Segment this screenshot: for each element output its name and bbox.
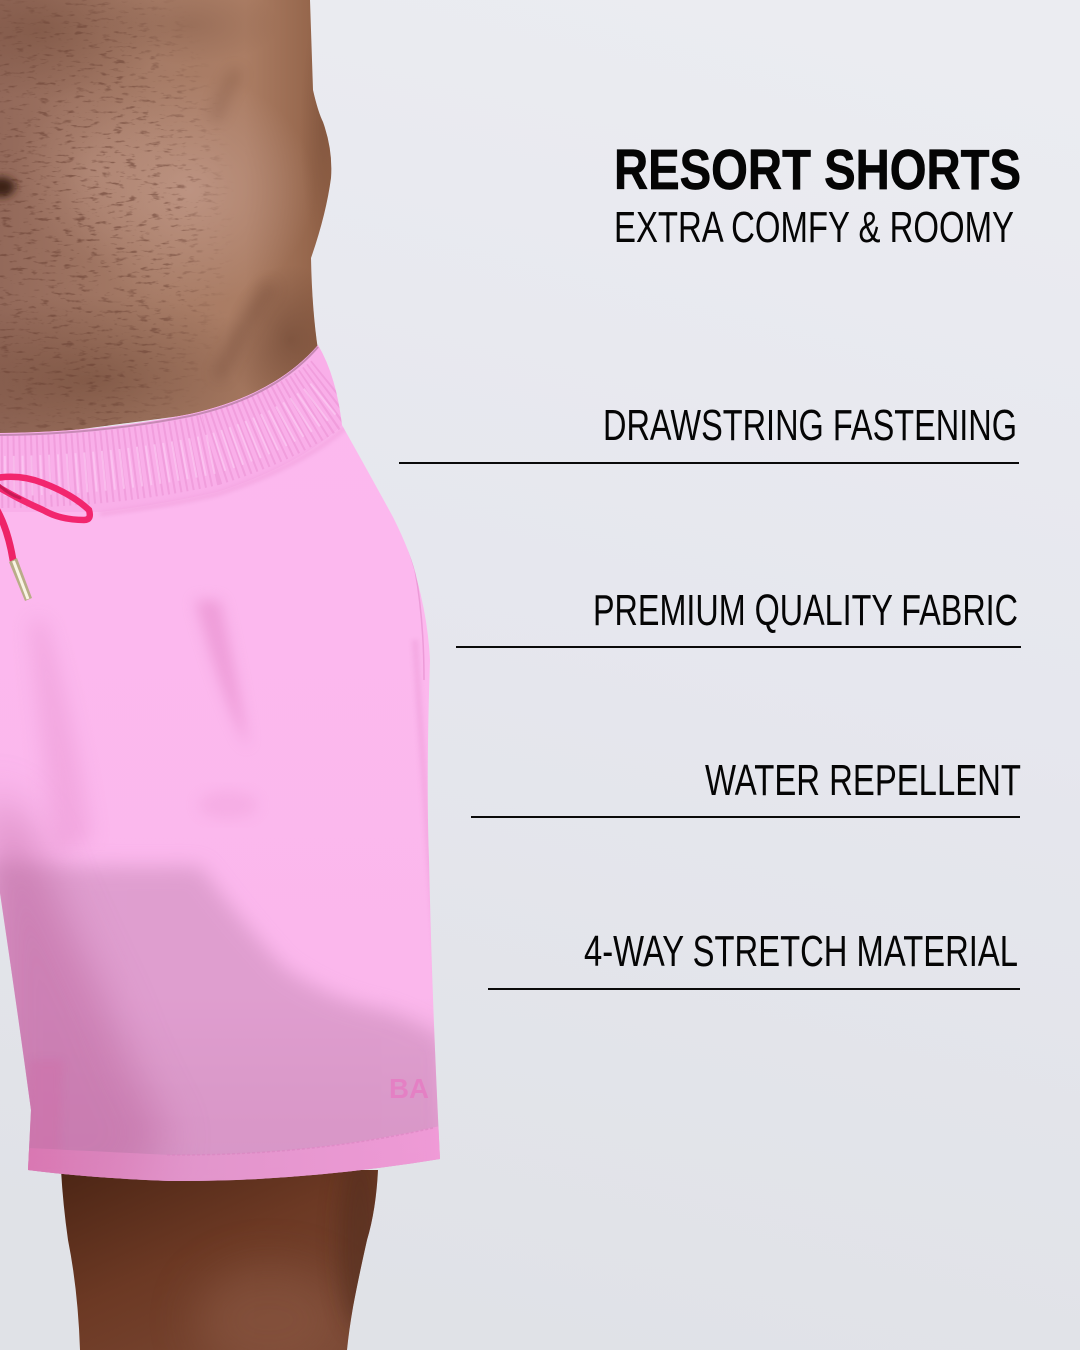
chest hair [0,0,240,440]
drawstring metal tip [9,558,32,601]
thigh [61,1170,378,1350]
shorts [0,345,445,1200]
hem [28,1126,440,1181]
waistband [0,345,342,512]
navel [0,177,15,197]
drawstring [0,477,90,560]
logo on leg: BA [389,1073,429,1104]
photo: model torso and thigh wearing pink shorts [0,0,445,1350]
torso [0,0,332,433]
side panel [29,1104,31,1148]
fabric folds [33,630,89,845]
lower shadow [0,860,445,1200]
